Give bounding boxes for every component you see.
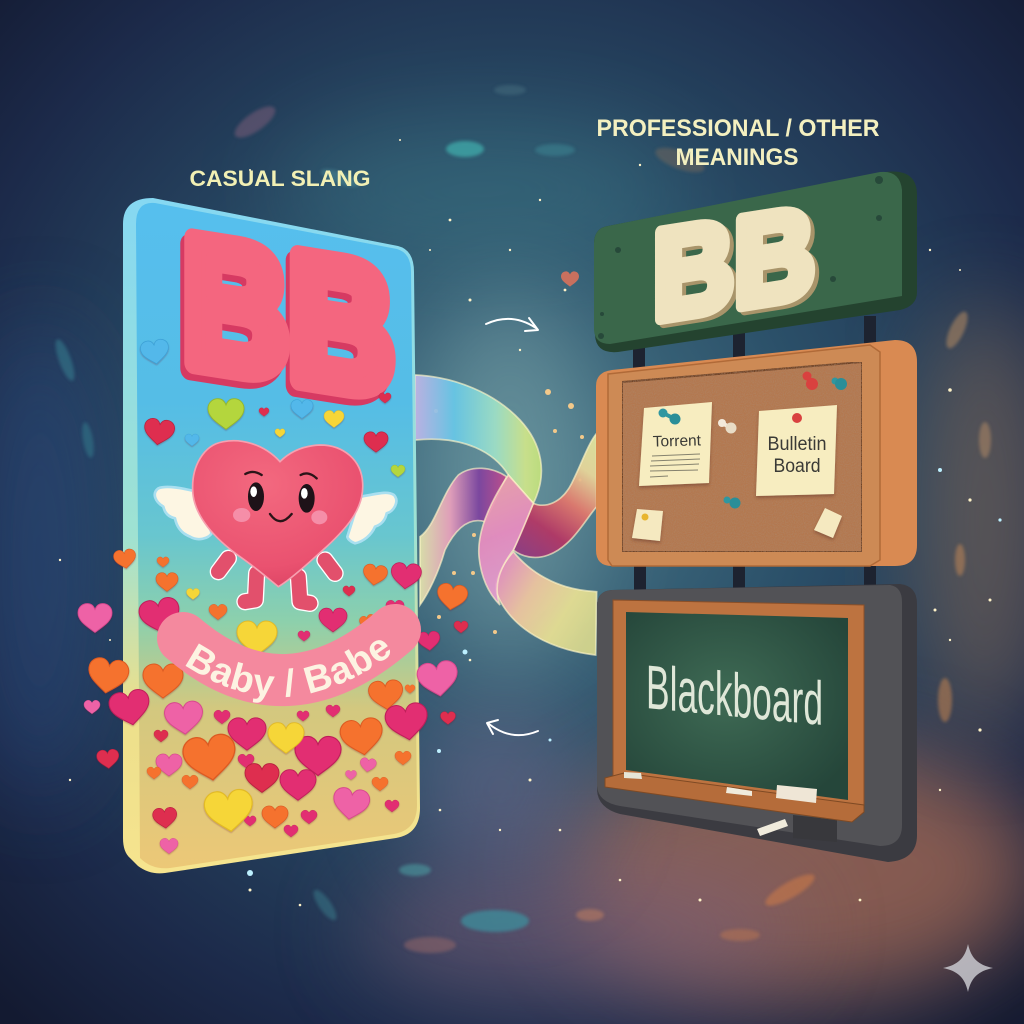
arrow: professional to casual (487, 720, 538, 735)
small sticky notes (632, 508, 842, 541)
chalk ledge (605, 773, 864, 822)
rainbow ribbons connecting the panels (415, 375, 597, 655)
support posts (633, 316, 876, 591)
face (233, 472, 327, 524)
panel: cork bulletin board (596, 340, 917, 566)
note: Torrent (639, 402, 712, 486)
banner: Baby / Babe (157, 604, 421, 706)
heart body (193, 441, 363, 587)
sign bolts (598, 176, 883, 339)
heading: casual slang: CASUAL SLANG (190, 166, 370, 191)
sign board (594, 172, 902, 344)
note: Bulletin Board: Bulletin (768, 434, 826, 455)
note: Torrent: Torrent (653, 432, 702, 451)
big BB letters: BB (179, 205, 390, 441)
banner: Baby / Babe: Baby / Babe (186, 640, 390, 703)
sign letters BB: BB (657, 184, 819, 350)
wings (155, 487, 396, 543)
scattered hearts: lower (84, 656, 460, 854)
mascot: winged heart character (155, 441, 396, 603)
hearts behind banner (78, 582, 469, 711)
wood frame (608, 345, 880, 566)
ribbon: purple left lobe (420, 468, 507, 605)
floating heart small (561, 271, 579, 287)
heading: professional / other meanings: PROFESSIONAL / OTHER (596, 115, 880, 142)
chalk pieces and eraser (624, 772, 817, 836)
panel: green sign with BB (594, 171, 917, 352)
big BB letters: BB (183, 199, 394, 435)
icon: sparkle watermark (943, 944, 993, 992)
ribbon: crimson band to corkboard (513, 433, 597, 557)
arrow: casual to professional (486, 318, 538, 331)
ribbon: pink fold (479, 475, 533, 605)
slate side (597, 584, 917, 862)
cork surface (622, 362, 862, 552)
sign side shade (594, 171, 917, 352)
orange back panel (596, 340, 917, 566)
ribbon: blue and green arc (415, 375, 541, 503)
panel face (136, 203, 417, 868)
scattered hearts: upper (113, 338, 422, 591)
heading line two: MEANINGS (676, 144, 798, 171)
panel edge (123, 198, 420, 873)
panel: casual slang (78, 198, 468, 874)
push pins (658, 372, 847, 508)
panel: blackboard (597, 584, 917, 862)
wood frame (613, 600, 864, 812)
mount block (793, 815, 837, 842)
note: Bulletin Board: Board (774, 456, 820, 477)
limb outlines (218, 558, 335, 603)
slate front (597, 585, 902, 846)
note: Bulletin Board (756, 405, 837, 496)
arms and legs (218, 558, 335, 603)
sign letters BB: BB (653, 181, 815, 347)
ribbon: lower band to blackboard (496, 552, 597, 655)
chalk word: Blackboard (646, 652, 823, 738)
chalkboard surface (626, 612, 848, 800)
